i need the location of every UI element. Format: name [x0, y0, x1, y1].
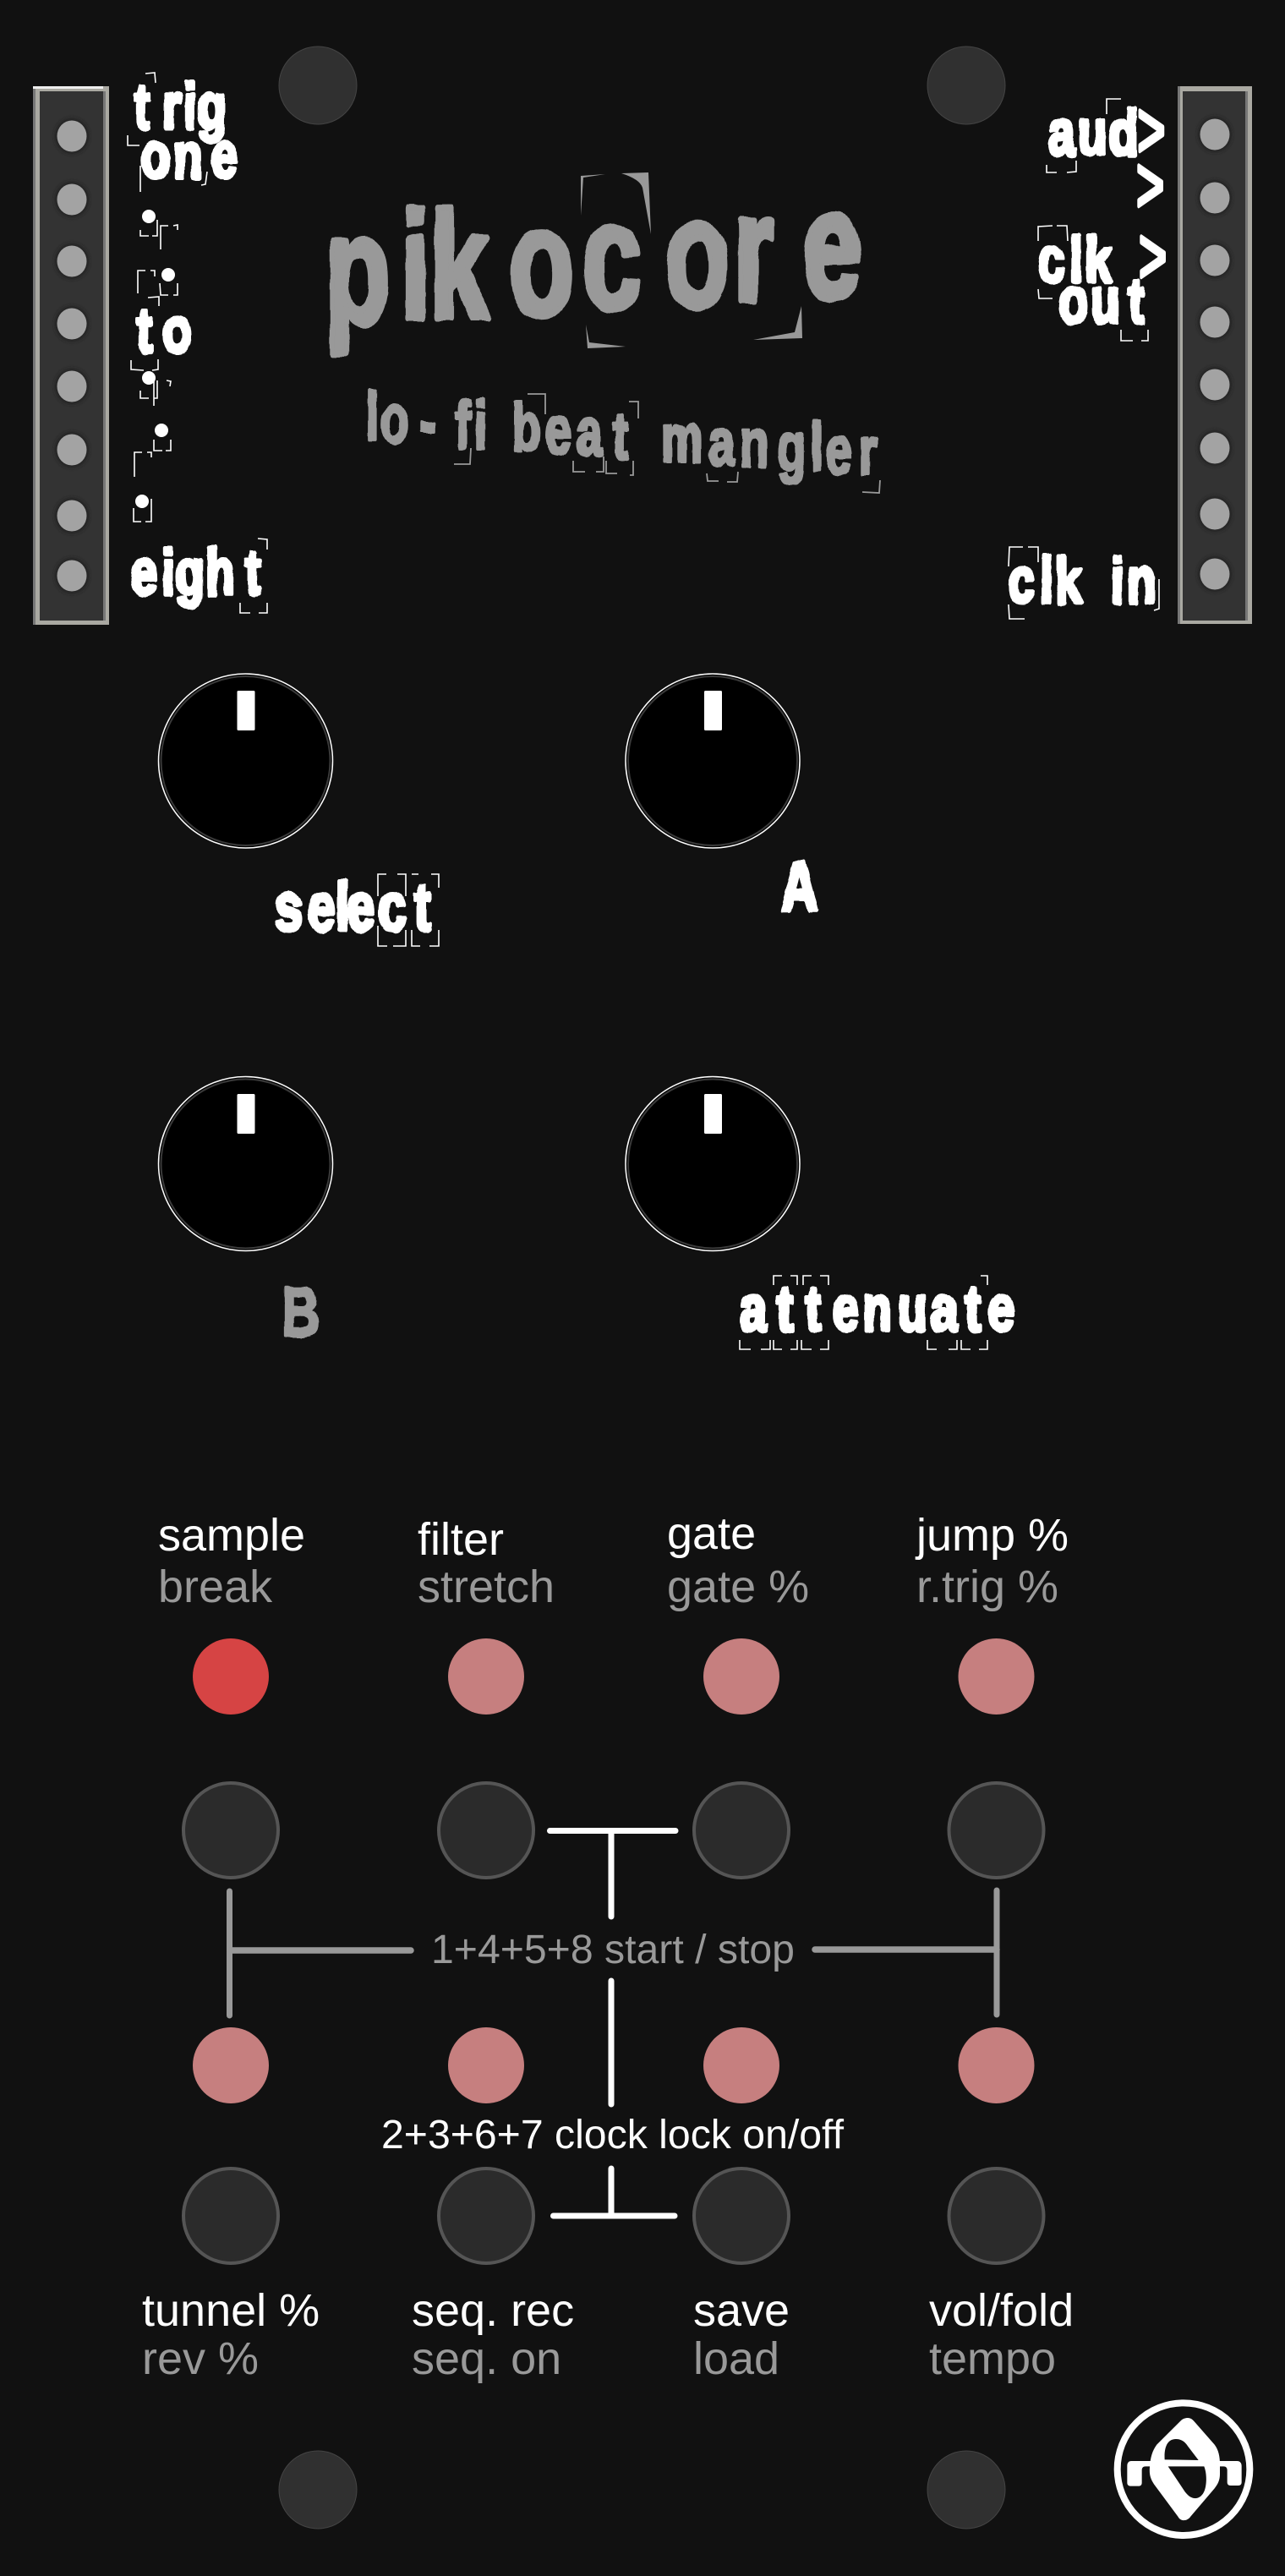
label: tunnel % / rev %: rev % — [142, 2333, 259, 2384]
label: gate / gate %: gate % — [667, 1561, 809, 1612]
label: gate / gate % — [667, 1508, 809, 1612]
knob: B — [159, 1077, 333, 1251]
label: filter / stretch: stretch — [418, 1561, 555, 1612]
label: jump % / r.trig % — [915, 1510, 1069, 1612]
knob: select — [159, 674, 333, 848]
screw: top right — [927, 46, 1005, 124]
label: save / load: save — [693, 2285, 790, 2336]
label: vol/fold / tempo — [929, 2285, 1074, 2384]
label: sample / break: sample — [158, 1510, 305, 1561]
label: seq. rec / seq. on: seq. on — [412, 2333, 561, 2384]
label: tunnel % / rev %: tunnel % — [142, 2285, 320, 2336]
label: eight: eight — [131, 537, 260, 609]
label: select: select — [275, 869, 431, 944]
right jack strip: outputs and clock — [1178, 86, 1252, 624]
label: jump % / r.trig %: r.trig % — [916, 1561, 1058, 1612]
bracket: 1+4+5+8 start / stop connector — [230, 1890, 997, 2015]
button row 1 — [183, 1783, 1043, 1878]
subtitle: lo-fi beat mangler: lo-fi beat mangler — [366, 378, 877, 489]
label: clk output — [1038, 211, 1167, 301]
button labels: top row — [158, 1508, 1069, 1612]
label: clk output: clk — [1038, 224, 1112, 296]
caption: clock lock combo: 2+3+6+7 clock lock on/off — [381, 2112, 845, 2158]
title: pikocore: pikocore — [325, 160, 861, 354]
dots between to and eight — [134, 371, 171, 522]
label: jump % / r.trig %: jump % — [915, 1510, 1069, 1561]
label: A: A — [780, 848, 818, 926]
label: tunnel % / rev % — [142, 2285, 320, 2384]
label: sample / break — [158, 1510, 305, 1612]
label: attenuate: attenuate — [740, 1273, 1014, 1345]
label: vol/fold / tempo: vol/fold — [929, 2285, 1074, 2336]
label: aud outputs — [1047, 85, 1165, 175]
label: clk in: clk in — [1009, 545, 1156, 617]
bracket: 2+3+6+7 clock lock connector — [550, 1831, 675, 2216]
label: B: B — [282, 1273, 320, 1351]
caption: start / stop combo: 1+4+5+8 start / stop — [431, 1927, 795, 1972]
label: out: out — [1059, 265, 1144, 337]
label: clk output: > — [1139, 211, 1167, 301]
left jack strip: eight inputs — [33, 86, 109, 625]
label: filter / stretch: filter — [418, 1514, 504, 1565]
label: save / load: load — [693, 2333, 779, 2384]
screw: bottom left — [279, 2451, 357, 2529]
label: filter / stretch — [418, 1514, 555, 1612]
knob: A — [626, 674, 800, 848]
knob: attenuate — [626, 1077, 800, 1251]
button labels: bottom row — [142, 2285, 1074, 2384]
LED row 2 — [193, 2027, 1035, 2103]
label: save / load — [693, 2285, 790, 2384]
label: to: to — [136, 295, 192, 367]
button row 2 — [183, 2169, 1043, 2263]
LED row 1 — [193, 1638, 1035, 1715]
dots between one and to — [138, 210, 178, 295]
label: sample / break: break — [158, 1561, 273, 1612]
arrow: second audio output: > — [1136, 139, 1164, 230]
label: aud outputs: > — [1137, 85, 1165, 175]
label: seq. rec / seq. on: seq. rec — [412, 2285, 574, 2336]
label: one: one — [141, 120, 238, 192]
label: trig: trig — [134, 71, 227, 143]
logo — [1118, 2403, 1249, 2535]
label: gate / gate %: gate — [667, 1508, 756, 1559]
screw: top left — [279, 46, 357, 124]
screw: bottom right — [927, 2451, 1005, 2529]
label: seq. rec / seq. on — [412, 2285, 574, 2384]
label: aud outputs: aud — [1048, 97, 1139, 169]
label: vol/fold / tempo: tempo — [929, 2333, 1056, 2384]
